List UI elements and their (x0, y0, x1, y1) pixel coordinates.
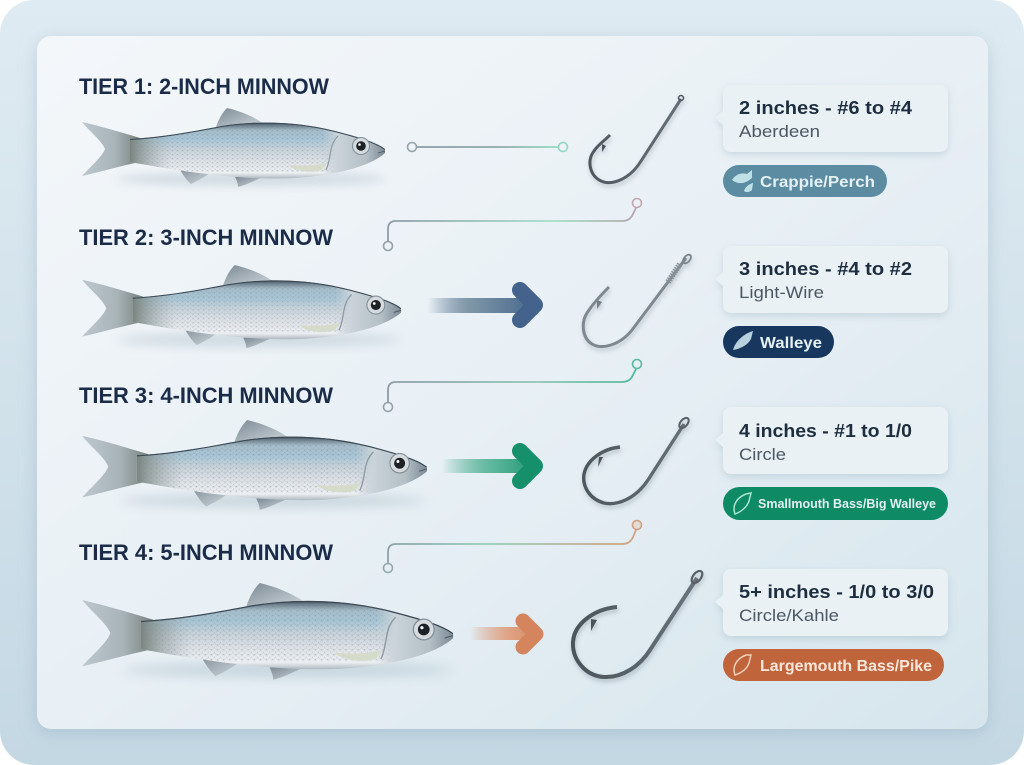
pill: smallmouth bass/big walleye: Smallmouth Bass/Big Walleye (758, 497, 936, 511)
callout: size 3 inches: 3 inches - #4 to #2 (739, 258, 912, 279)
arrow: blue (428, 290, 535, 320)
connector line 2 (384, 198, 642, 250)
callout: size 3 inches (715, 246, 948, 313)
hook: light-wire (583, 253, 693, 346)
callout: size 2 inches: Aberdeen (739, 123, 820, 141)
pill: walleye (723, 326, 834, 358)
connector line 4 (384, 520, 642, 572)
fish: 5-inch minnow (82, 583, 459, 680)
pill: largemouth bass/pike: Largemouth Bass/Pike (760, 658, 932, 675)
heading: tier 2: TIER 2: 3-INCH MINNOW (79, 225, 333, 250)
pill: walleye: Walleye (760, 335, 822, 352)
callout: size 5+ inches (715, 569, 948, 636)
connector line 3 (384, 360, 642, 412)
callout: size 4 inches: Circle (739, 446, 786, 464)
pill: smallmouth bass/big walleye (723, 487, 948, 520)
callout: size 2 inches (715, 85, 948, 152)
callout: size 2 inches: 2 inches - #6 to #4 (739, 97, 913, 118)
heading: tier 3: TIER 3: 4-INCH MINNOW (79, 383, 333, 408)
heading: tier 1: TIER 1: 2-INCH MINNOW (79, 74, 329, 99)
tier 2 row (79, 198, 948, 358)
connector line 1 (408, 142, 568, 152)
heading: tier 4: TIER 4: 5-INCH MINNOW (79, 540, 333, 565)
arrow: orange (470, 621, 536, 647)
callout: size 5+ inches: 5+ inches - 1/0 to 3/0 (739, 581, 934, 602)
tier 3 row (79, 360, 948, 520)
callout: size 4 inches: 4 inches - #1 to 1/0 (739, 420, 912, 441)
tier 1 row (79, 74, 948, 197)
pill: crappie/perch (723, 165, 887, 197)
callout: size 5+ inches: Circle/Kahle (739, 607, 839, 625)
callout: size 3 inches: Light-Wire (739, 284, 824, 302)
hook: circle/kahle (573, 569, 704, 677)
fish: 3-inch minnow (82, 265, 406, 348)
callout: size 4 inches (715, 407, 948, 474)
pill: largemouth bass/pike (723, 649, 944, 681)
fish: 4-inch minnow (82, 420, 433, 510)
tier 4 row (79, 520, 948, 681)
hook: circle (584, 416, 691, 504)
hook: aberdeen (590, 96, 684, 183)
fish: 2-inch minnow (82, 108, 390, 187)
pill: crappie/perch: Crappie/Perch (760, 174, 875, 191)
arrow: green (442, 451, 535, 481)
